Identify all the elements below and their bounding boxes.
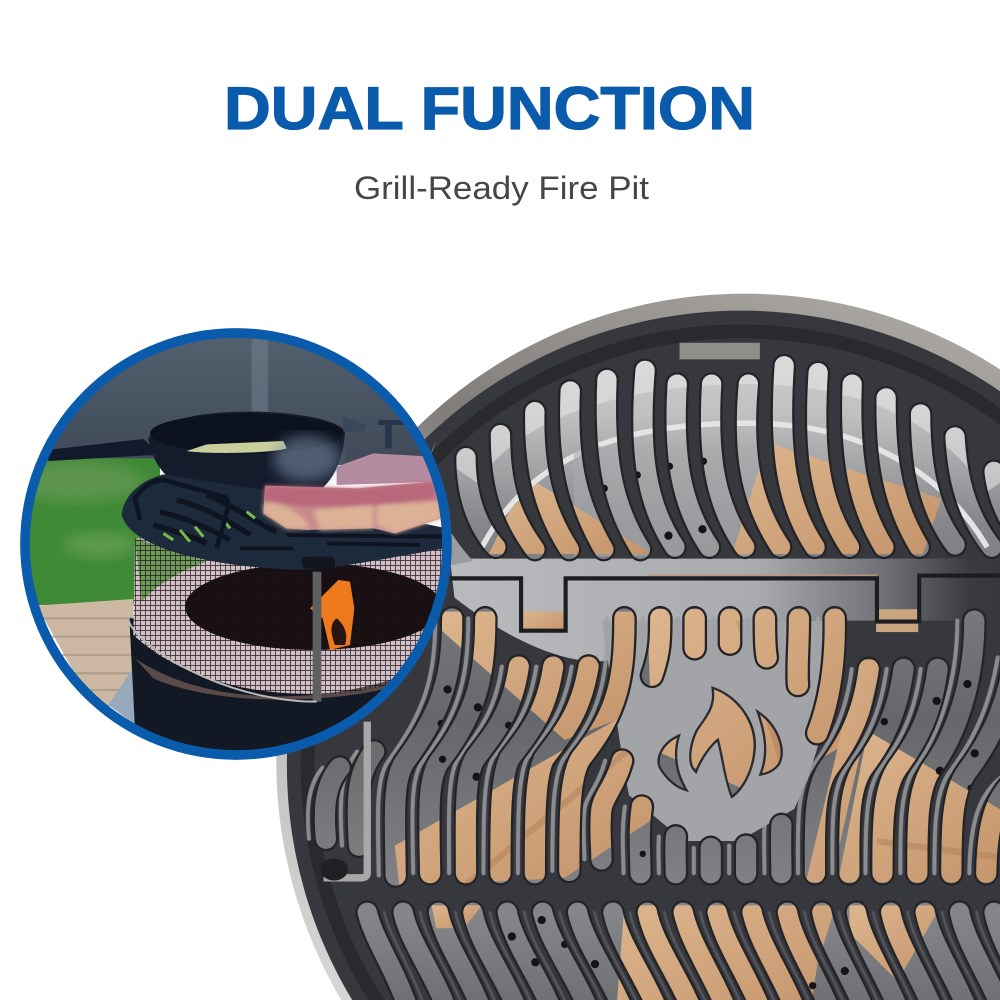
steak — [263, 482, 442, 533]
mesh cylinder — [133, 538, 447, 700]
silver centre plate — [426, 442, 1000, 841]
product photo: fire pit grate — [276, 290, 1000, 1000]
vent holes — [438, 458, 979, 989]
subtitle: Grill-Ready Fire Pit — [354, 170, 649, 206]
wood logs — [395, 444, 1000, 1000]
post top bracket — [302, 557, 335, 569]
cast iron grill grate — [122, 474, 447, 570]
inset photo: grilling on the fire pit — [10, 325, 453, 762]
blue circular frame — [25, 333, 447, 755]
title: DUAL FUNCTION — [224, 75, 755, 142]
outer steel rim — [276, 294, 1000, 1000]
concrete base — [108, 670, 135, 724]
support rod — [313, 572, 321, 702]
back steak — [337, 453, 438, 485]
lifting handle rod — [320, 722, 367, 881]
fire — [310, 580, 354, 650]
green lawn — [30, 458, 160, 605]
slate fence background — [52, 338, 422, 465]
mesh rim — [128, 618, 317, 702]
tab gap lines — [450, 576, 1000, 631]
grey latch notch — [680, 343, 760, 359]
wooden deck — [37, 599, 133, 707]
slot outlines — [325, 366, 1000, 1000]
view through slots: wood and steel bowl — [314, 356, 1000, 1000]
white backdrop of photo — [365, 482, 442, 528]
grill handle — [135, 480, 228, 548]
bowl ring highlights — [482, 423, 987, 547]
smoke — [273, 435, 340, 482]
slat highlights — [308, 618, 1000, 1000]
cast iron skillet — [48, 412, 404, 490]
wood grain shading — [464, 621, 1000, 887]
grate disc — [287, 311, 1000, 1000]
fire pit body — [129, 618, 382, 750]
